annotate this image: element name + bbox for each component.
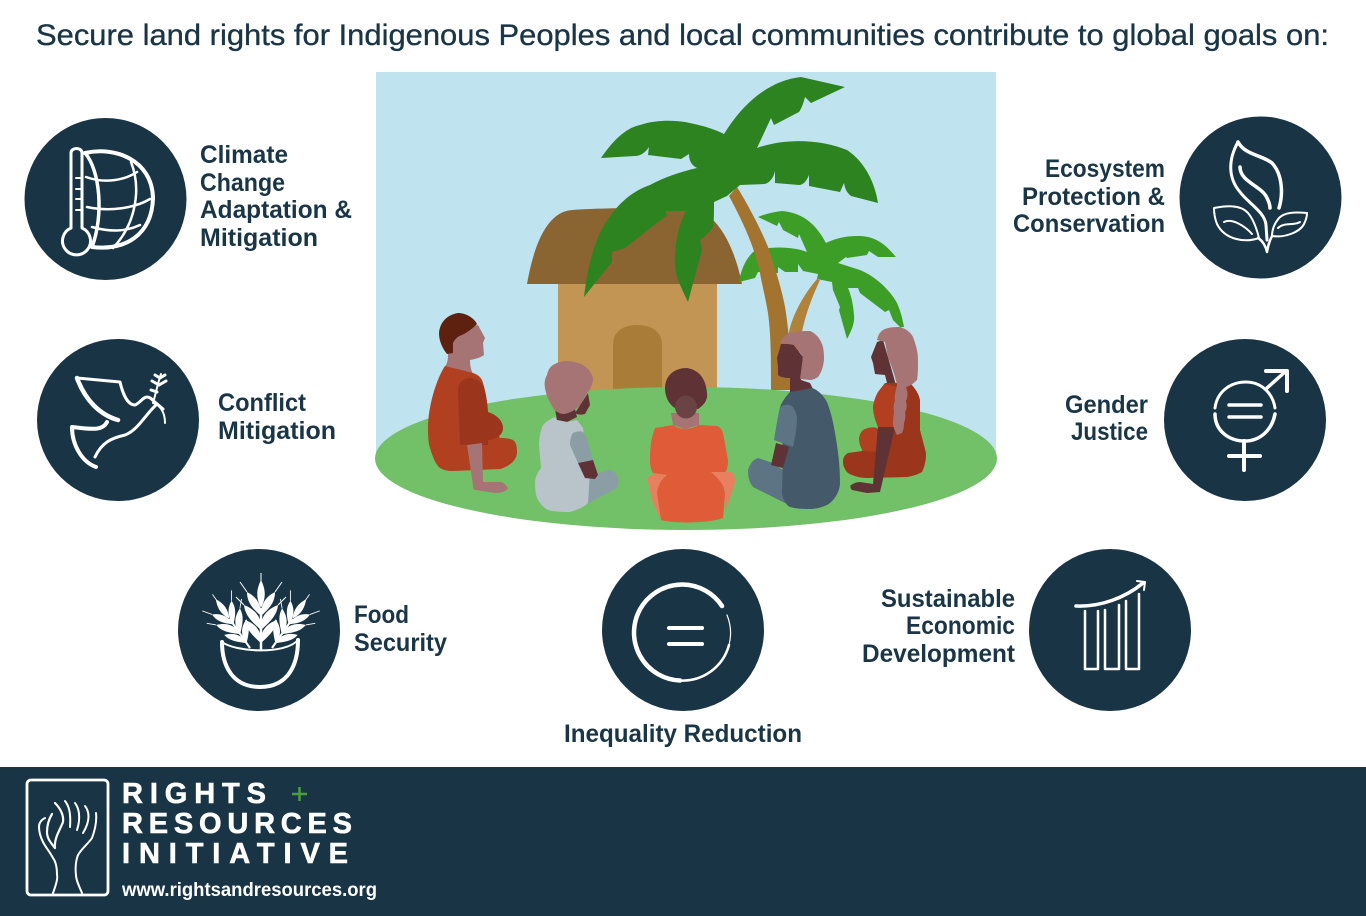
label: sustainable economic development: Development [862,640,1016,668]
large palm tree [584,77,878,390]
ground [375,387,997,530]
label: climate change [200,141,352,252]
icon: gender justice symbol [1164,339,1326,501]
logo: organisation name [122,778,352,870]
person 3: woman in orange [647,368,735,522]
label: ecosystem protection: Ecosystem [1045,155,1165,183]
hut [527,208,742,395]
website url: www.rightsandresources.org [121,880,377,901]
label: climate change: Adaptation & [200,196,352,224]
label: gender justice: Justice [1071,418,1148,446]
label: sustainable economic development: Economic [906,612,1015,640]
person 1: man in red shirt [428,313,517,493]
person 4: seated figure in blue-grey [748,331,840,509]
label: sustainable economic development [862,585,1016,668]
label: sustainable economic development: Sustainable [881,585,1015,613]
logo: organisation name: INITIATIVE [122,838,348,870]
label: climate change: Climate [200,141,288,169]
label: ecosystem protection: Protection & [1022,183,1165,211]
small palm tree [739,211,904,360]
icon: food security wheat in bowl [178,549,340,711]
icon: peace dove [37,339,199,501]
sky [376,72,996,458]
label: food security: Food [354,601,409,629]
central illustration: community under palm trees [375,72,997,530]
person 5: woman with long braid [843,327,926,493]
icon: sustainable economic development chart [1029,549,1191,711]
logo: green plus [292,787,307,801]
label: inequality reduction: Inequality Reduction [564,720,802,748]
label: climate change: Mitigation [200,224,318,252]
icon: climate change thermometer and globe [24,118,186,280]
label: conflict mitigation: Conflict [218,389,307,417]
label: food security: Security [354,629,447,657]
label: ecosystem protection: Conservation [1013,210,1165,238]
logo: hands emblem [27,780,108,895]
icon: ecosystem leaves [1180,116,1342,278]
icon: inequality reduction [602,549,764,711]
label: conflict mitigation: Mitigation [218,417,336,445]
title: Secure land rights for Indigenous Peoples and local communities contribute to global goals on: [36,19,1329,52]
label: climate change: Change [200,169,285,197]
label: gender justice [1065,391,1148,446]
logo: organisation name: RESOURCES [122,808,352,840]
label: ecosystem protection [1013,155,1165,238]
person 2: elder in grey [535,361,618,512]
label: gender justice: Gender [1065,391,1148,419]
label: conflict mitigation [218,389,336,445]
footer band [0,767,1366,916]
label: food security [354,601,447,657]
logo: organisation name: RIGHTS [122,778,266,810]
